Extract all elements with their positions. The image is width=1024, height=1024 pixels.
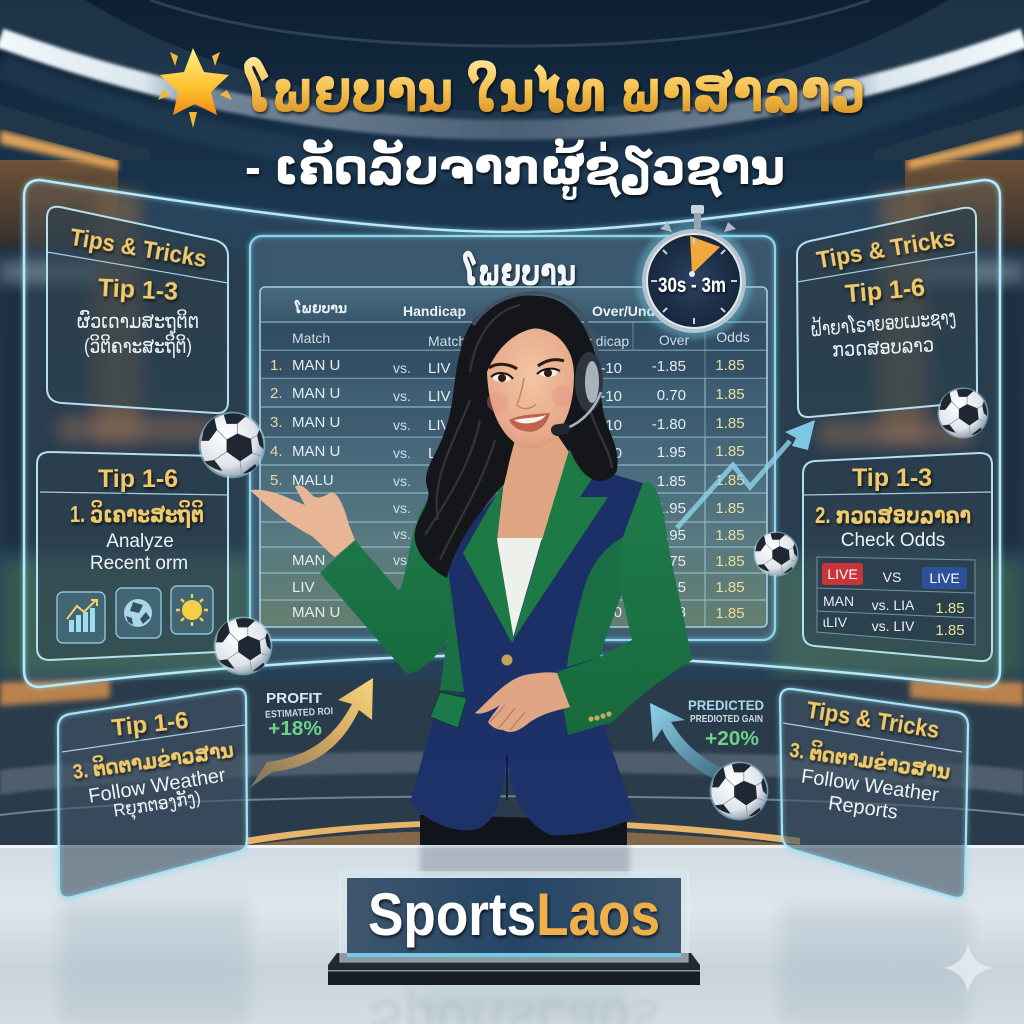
table rows: vs. [393,388,411,404]
table rows: LIV [428,445,451,462]
table rows: vs. [393,526,411,542]
live badge red: LIVE [827,566,858,582]
odds table: Match [428,333,466,349]
icon: football 1 [199,412,265,478]
lower hand [475,672,570,732]
mini live table: vs. LIV [872,618,915,634]
tip text: Follow Weather [800,765,940,807]
title [158,48,866,200]
table rows: 1.85 [715,527,745,544]
table rows: 1.85 [715,386,745,403]
nose [517,378,536,409]
odds table: Over/Under [592,303,669,319]
table rows: -10 [600,388,622,405]
headset [473,293,603,436]
table rows: 1.95 [657,444,686,461]
table rows: MAN [292,552,325,569]
odds table: Odds [716,329,750,345]
panel: center odds table [250,236,775,640]
live badge red [822,563,863,585]
panel: Tips and Tricks follow weather (bottom right): Reports [827,792,899,824]
table rows: vs. [393,552,411,568]
table rows: vs. [393,500,411,516]
table rows: LIV [428,360,451,377]
table rows: 1.85 [715,553,745,570]
callout: predicted +20%: PREDICTED [688,697,764,713]
arrow: predicted gain blue [650,703,722,778]
tip text: Analyze [106,531,174,552]
table heading: ໂພຍບານ [463,251,576,293]
icon: football 2 [214,617,272,675]
tip text: ຝ້າຍາໂຣາຍອບເມະຊາງ [809,305,957,341]
icon: star [158,48,232,128]
table rows: vs. [393,473,411,489]
table rows: 1.85 [715,415,745,432]
table rows: -1.80 [652,416,686,433]
table rows: LIV [292,579,315,596]
logo plaque: SportsLaos: SportsLaos [368,881,660,948]
live badge blue [922,567,967,589]
arrow: profit gold [250,678,373,788]
table rows: -10 [600,360,622,377]
panel: Tips and Tricks, Tip 1-3 (left top): (ວິຕິຄາະສະຖິຕິ) [84,334,192,358]
panel: Tips and Tricks, Tip 1-3 (left top) [47,207,228,413]
table rows: 1.95 [657,500,686,517]
big curved glass panel [24,180,1000,687]
table rows: -1.85 [652,358,686,375]
sleeve viewer right [557,481,692,735]
trousers [420,815,627,845]
mini live table [817,557,975,645]
table rows: MAN U [292,604,340,621]
brows [489,360,564,369]
icon: football 5 [710,762,768,820]
icon: football [116,588,161,638]
table rows: 1.85 [657,473,686,490]
table rows: 1.85 [715,605,745,622]
icon: football 4 [753,531,799,577]
lapel left [463,483,514,643]
blush right [552,385,572,407]
glass floor [0,845,1024,1024]
table rows: 1.75 [657,553,686,570]
tip label: Tip 1-6 [98,465,178,493]
panel: Tips and Tricks, Tip 1-6 (right top): ກວດສອບລາວ [832,334,935,362]
mini live table: MAN [823,593,854,609]
table rows: MAN U [292,414,340,431]
table rows: vs. [393,417,411,433]
odds table: Handicap [570,333,629,349]
lapel right [513,447,608,640]
heading: Tips & Tricks [805,697,941,744]
tip heading: 2. ກວດສອບລາຄາ [815,502,971,528]
callout: predicted +20% [688,697,764,750]
table rows: 1.88 [657,604,686,621]
cuff buttons [588,711,612,722]
face [487,328,574,448]
panel: Tip 1-3 check odds (right middle) [803,453,992,661]
hair front lock [415,305,617,578]
table rows: MALU [292,472,334,489]
icon: sun [171,586,213,634]
mini live table: vs. LIA [872,597,915,613]
mini live table: 1.85 [935,622,965,639]
title line 2: - ເຄັດລັບຈາກຜູ້ຊ່ຽວຊານ [245,138,785,200]
table rows: 5. [270,472,283,489]
tip label: Tip 1-6 [110,707,190,742]
live badge blue: LIVE [929,570,960,586]
odds table: Over [659,332,690,348]
callout: predicted +20%: PREDIOTED GAIN [690,714,763,725]
table rows: 2. [270,385,283,402]
callout: profit +18%: PROFIT [266,690,322,707]
odds table: Handicap [403,303,466,319]
callout: profit +18%: ESTIMATED ROI [265,706,334,721]
arrow: growth line [677,420,815,528]
panel: Tip 1-6 analyze (left middle) [37,452,228,660]
tip label: Tip 1-3 [97,274,179,306]
table rows: MAN U [292,357,340,374]
panel: Tips and Tricks, Tip 1-6 (right top) [797,208,977,417]
table rows: 1.85 [715,579,745,596]
logo plaque: SportsLaos [328,872,700,1024]
table rows: 1.95 [657,527,686,544]
tip text: ຜົວເດາມສະຖຸຕິຕ [77,309,199,337]
table rows: 1.85 [715,357,745,374]
table rows: LIV [428,417,451,434]
icon: chart [57,592,105,643]
panel: Tip 1-6 follow weather (bottom left) [58,689,247,898]
table rows: 1. [270,357,283,374]
heading: Tips & Tricks [815,225,957,274]
tip label: Tip 1-3 [852,464,932,492]
table rows: MAN U [292,443,340,460]
odds table: ໂພຍບານ [294,299,347,316]
hair back [415,295,618,578]
callout: profit +18% [265,690,334,740]
table rows: 1.95 [657,579,686,596]
table rows: 0.70 [657,387,686,404]
table rows: LIV [428,388,451,405]
jacket body [410,450,643,835]
table rows: 4. [270,443,283,460]
table rows: -10 [600,417,622,434]
mini live table: VS [883,569,901,585]
table rows: -10 [600,604,622,621]
icon: football 3 [938,388,988,438]
title line 1: ໂພຍບານ ໃນໄທ ພາສາລາວ [243,56,866,124]
table rows: vs. [393,360,411,376]
tip heading: 3. ຕິດຕາມຂ່າວສານ [788,737,952,784]
table rows [270,357,745,622]
pocket flap [430,692,467,728]
presenter woman [250,293,692,845]
tip heading: 3. ຕິດຕາມຂ່າວສານ [71,737,235,784]
stopwatch: 30s - 3m [658,274,726,297]
white top [497,538,542,638]
mini live table: ɩLIV [823,614,848,630]
panel: Tips and Tricks follow weather (bottom right) [780,689,968,898]
table rows: -10 [600,445,622,462]
raised hand [250,485,355,557]
tip label: Tip 1-6 [844,274,926,308]
table rows: 1.85 [715,472,745,489]
table rows: 3. [270,414,283,431]
tip heading: 1. ວິເຄາະສະຖິຕິ [70,500,204,528]
side panel [567,537,623,667]
hair fringe [484,303,577,372]
odds table: Match [292,330,330,346]
jacket button [502,654,512,666]
table rows: vs. [393,445,411,461]
mouth [509,413,550,432]
left lower panel [440,560,464,692]
odds table [260,287,767,627]
sleeve viewer left [320,500,447,674]
table rows: MAN U [292,385,340,402]
neck and chest [497,436,569,540]
callout: profit +18%: +18% [268,718,322,740]
icon: sparkle watermark [943,943,993,993]
eyes [491,369,560,382]
callout: predicted +20%: +20% [705,728,759,750]
tip text: Follow Weather [87,764,227,808]
mini live table: 1.85 [935,600,965,617]
table rows: 1.85 [715,443,745,460]
panel: Tip 1-6 analyze (left middle): Recent orm [90,553,188,574]
blush [487,392,509,412]
heading: Tips & Tricks [68,224,209,273]
panel: Tip 1-6 follow weather (bottom left): Rຍຸກຕອງກັງ) [112,786,202,824]
stopwatch [636,205,752,339]
tip text: Check Odds [841,530,945,551]
table rows: 1.85 [715,500,745,517]
